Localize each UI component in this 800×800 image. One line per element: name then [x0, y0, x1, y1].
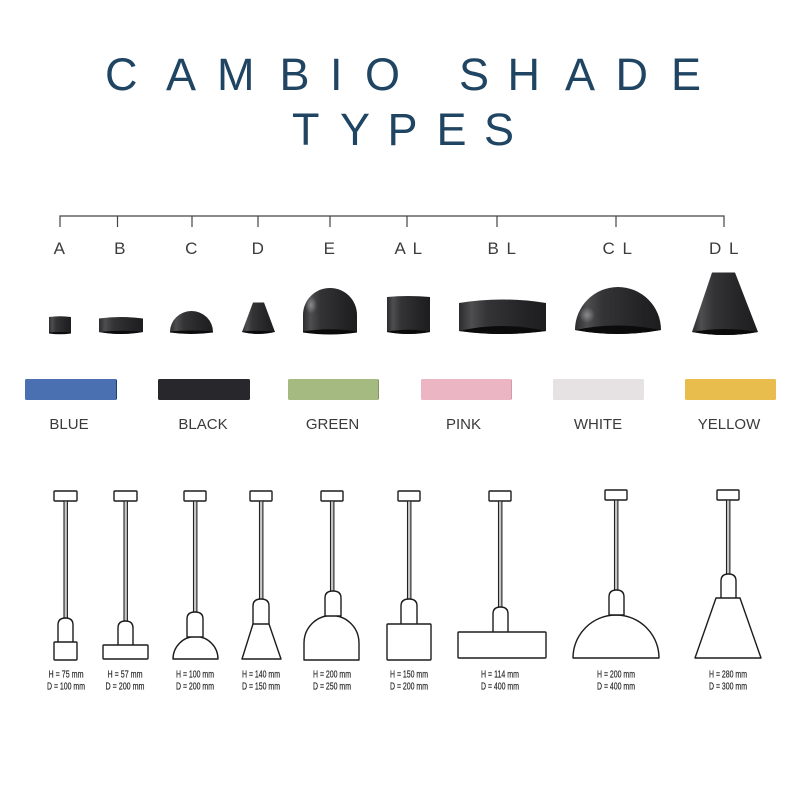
bracket: shade type connector [60, 216, 724, 227]
shade CL [575, 287, 661, 334]
lamp C: H = 100 mm [176, 670, 214, 680]
lamp line drawings [47, 490, 761, 692]
shade C [170, 311, 213, 334]
lamp CL: D = 400 mm [597, 682, 635, 692]
shade type labels: D [252, 239, 265, 258]
shade type labels: C [185, 239, 199, 258]
lamp E [304, 491, 359, 692]
lamp BL: D = 400 mm [481, 682, 519, 692]
shade E [303, 288, 357, 334]
title [105, 49, 701, 155]
swatch: black [158, 379, 250, 433]
lamp A: H = 75 mm [48, 670, 84, 680]
swatch: pink [421, 379, 512, 433]
swatch: black: BLACK [178, 416, 228, 433]
swatch: yellow [685, 379, 776, 433]
swatch: green: GREEN [306, 416, 359, 433]
swatch: white: WHITE [574, 416, 622, 433]
lamp A [47, 491, 85, 692]
lamp E: D = 250 mm [313, 682, 351, 692]
lamp B: H = 57 mm [108, 670, 142, 680]
title: TYPES [292, 104, 514, 155]
lamp AL: D = 200 mm [390, 682, 428, 692]
swatch: white [553, 379, 644, 433]
swatch: blue: BLUE [49, 416, 89, 433]
shade type labels: C L [603, 239, 633, 258]
shade type labels: E [324, 239, 336, 258]
shade type labels: B [114, 239, 127, 258]
shade D [242, 302, 275, 334]
lamp E: H = 200 mm [313, 670, 351, 680]
lamp DL: D = 300 mm [709, 682, 747, 692]
shade A [49, 316, 71, 334]
shade type labels: D L [709, 239, 740, 258]
swatch: yellow: YELLOW [698, 416, 761, 433]
lamp B: D = 200 mm [106, 682, 144, 692]
shade type labels: A [54, 239, 66, 258]
shade type labels: A L [394, 239, 424, 258]
swatch: pink: PINK [446, 416, 481, 433]
lamp DL: H = 280 mm [709, 670, 747, 680]
lamp D [242, 491, 281, 692]
lamp D: H = 140 mm [242, 670, 280, 680]
shade type labels [54, 239, 740, 258]
lamp BL: H = 114 mm [481, 670, 519, 680]
colour swatches [25, 379, 776, 433]
lamp CL [573, 490, 659, 692]
shade BL [459, 300, 546, 334]
shade AL [387, 296, 430, 334]
lamp C [173, 491, 218, 692]
lamp A: D = 100 mm [47, 682, 85, 692]
swatch: green [288, 379, 379, 433]
title: CAMBIOSHADE [105, 49, 701, 100]
lamp BL [458, 491, 546, 692]
lamp DL [695, 490, 761, 692]
lamp AL: H = 150 mm [390, 670, 428, 680]
shade B [99, 317, 143, 334]
lamp C: D = 200 mm [176, 682, 214, 692]
shade DL [692, 272, 758, 335]
lamp D: D = 150 mm [242, 682, 280, 692]
lamp CL: H = 200 mm [597, 670, 635, 680]
shade type labels: B L [487, 239, 518, 258]
black shades row [49, 272, 758, 335]
swatch: blue [25, 379, 117, 433]
lamp B [103, 491, 148, 692]
lamp AL [387, 491, 431, 692]
